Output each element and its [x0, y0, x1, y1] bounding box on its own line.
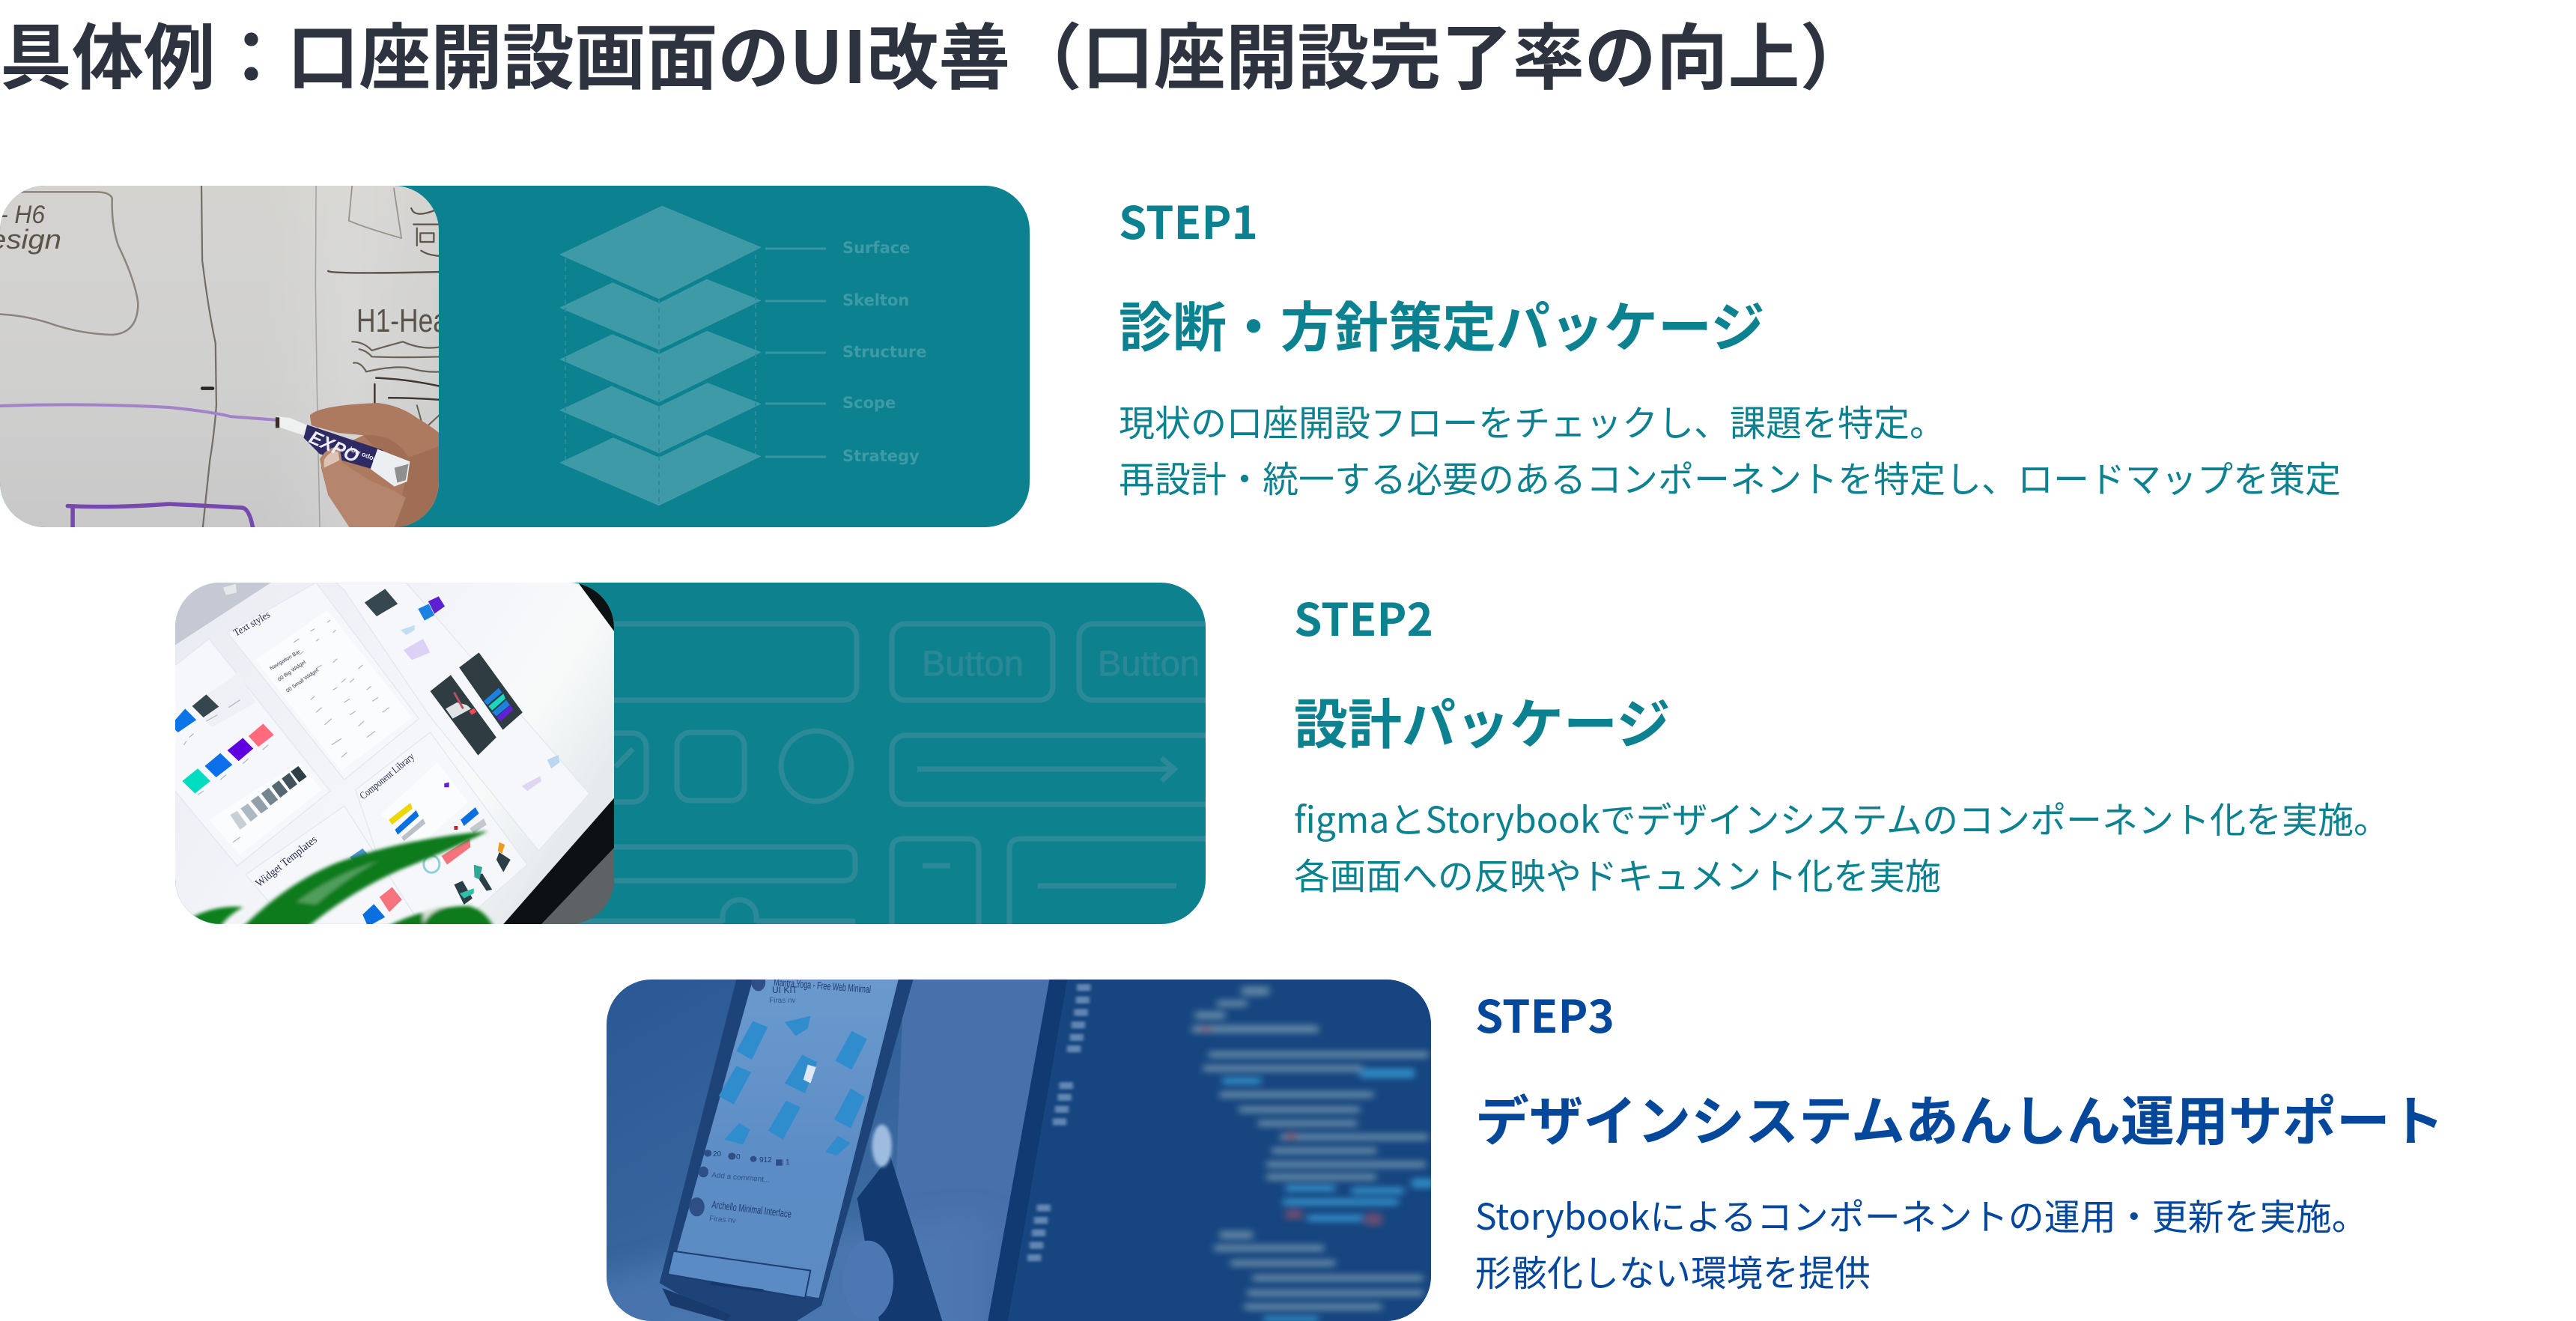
- text: figmaとStorybookでデザインシステムのコンポーネント化を実施。: [1294, 791, 2390, 843]
- text: 現状の口座開設フローをチェックし、課題を特定。: [1119, 394, 1945, 446]
- photo: whiteboard and hand: EXPO: [306, 427, 362, 467]
- text: Storybookによるコンポーネントの運用・更新を実施。: [1475, 1188, 2368, 1240]
- text: 形骸化しない環境を提供: [1475, 1244, 1871, 1296]
- button labels: Button: [922, 643, 1024, 683]
- monitor: [896, 980, 1049, 1237]
- layer labels: Skelton: [842, 291, 909, 309]
- phone screen text: [709, 976, 872, 1225]
- text: STEP3: [1475, 981, 1614, 1046]
- handwritten text on whiteboard: H1-Hea: [356, 303, 448, 339]
- line numbers blurred: [1027, 984, 1090, 1261]
- photo: design system on a tablet: 00 Small Widget: [285, 668, 320, 694]
- phone: [660, 980, 914, 1321]
- text: 設計パッケージ: [1294, 681, 1671, 759]
- layer labels: Scope: [842, 394, 896, 412]
- title: 具体例：口座開設画面のUI改善（口座開設完了率の向上）: [0, 0, 1871, 104]
- text: 診断・方針策定パッケージ: [1119, 284, 1765, 362]
- handwritten text on whiteboard: [0, 205, 439, 332]
- toolbar: [175, 583, 271, 645]
- monitor bezel: [579, 584, 614, 631]
- card headings: Component Library: [358, 751, 417, 802]
- phone screen text: 0: [736, 1153, 741, 1161]
- colour swatches: [192, 694, 219, 717]
- phone screen text: Firas nv: [709, 1215, 736, 1225]
- component chips: [389, 803, 413, 825]
- text: 再設計・統一する必要のあるコンポーネントを特定し、ロードマップを策定: [1119, 450, 2341, 502]
- micro rows: [183, 620, 389, 842]
- panel: step 2 visual: [175, 583, 1206, 924]
- illustrations: [496, 852, 511, 872]
- text: 各画面への反映やドキュメント化を実施: [1294, 847, 1941, 899]
- text block: step 1: [1119, 187, 2341, 502]
- phone screen text: 20: [713, 1150, 722, 1158]
- photo: whiteboard and hand: low odor: [348, 446, 377, 463]
- code lines blurred: [1192, 986, 1434, 1321]
- layer labels: Structure: [842, 343, 927, 361]
- text block: step 2: [1294, 584, 2390, 899]
- text: STEP2: [1294, 584, 1433, 649]
- reactions row: [689, 974, 783, 1216]
- plant leaves: [192, 831, 493, 927]
- photo: design system on a tablet: Navigation Bar: [269, 649, 302, 672]
- phone screen text: Archello Minimal Interface: [711, 1198, 792, 1220]
- card headings: Widget Templates: [254, 833, 320, 890]
- photo: design system on a tablet: 00 Big Widget: [277, 660, 307, 683]
- phone screen text: 1: [786, 1158, 790, 1167]
- cards: [147, 583, 589, 924]
- phone screen text: UI KIT: [772, 985, 798, 995]
- button labels: Button: [1098, 643, 1200, 683]
- phone screen text: Firas nv: [769, 997, 796, 1005]
- phone screen text: 912: [759, 1156, 772, 1164]
- layer labels: Surface: [842, 239, 910, 257]
- text: デザインシステムあんしん運用サポート: [1475, 1078, 2444, 1156]
- handwritten text on whiteboard: - H6: [0, 201, 45, 229]
- panel: step 3 visual: [607, 980, 1431, 1321]
- hand holding marker: [276, 403, 442, 527]
- text: STEP1: [1119, 187, 1258, 252]
- photo: design system on a tablet: [147, 583, 617, 927]
- panel: step 1 visual: [0, 186, 1030, 527]
- button labels: [924, 651, 1198, 676]
- dark app screens: [430, 675, 496, 756]
- layer labels: Strategy: [842, 447, 920, 465]
- layer labels: [842, 239, 927, 465]
- text block: step 3: [1475, 981, 2444, 1296]
- stand: [857, 1156, 942, 1321]
- UI component wireframes: [577, 622, 1206, 924]
- photo: phone and code monitor with blue overlay: [571, 974, 1460, 1321]
- card headings: Text styles: [232, 609, 273, 639]
- shots: [719, 1016, 867, 1156]
- diagram: five planes stack: [555, 204, 927, 508]
- card headings: [232, 609, 417, 890]
- photo: whiteboard and hand: [0, 186, 448, 527]
- phone screen text: Add a comment...: [711, 1171, 771, 1185]
